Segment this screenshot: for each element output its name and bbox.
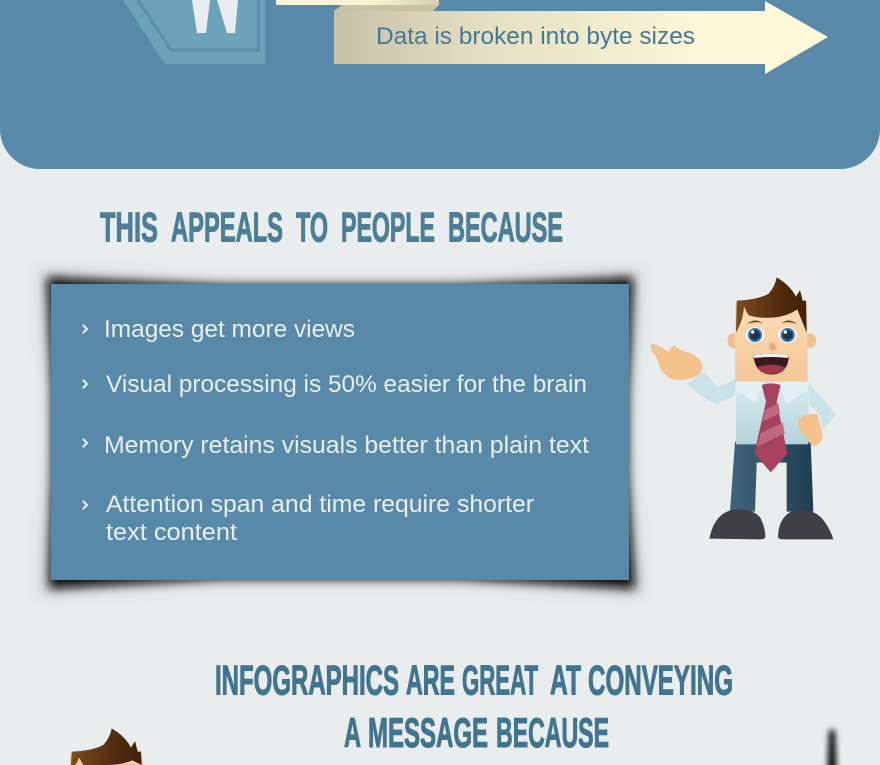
heading: infographics convey a message [215,656,733,756]
heading: this appeals to people: TO [296,204,328,250]
icon: hexagon badge with W [123,0,265,64]
panel: top blue header band [0,0,880,169]
list item 4: text content [106,519,237,546]
character tie [754,383,787,472]
list item 1: Images get more views [104,316,355,343]
icon: cartoon businessman presenting [650,277,837,539]
heading: this appeals to people [100,204,563,250]
list item 2: Visual processing is 50% easier for the brain [106,371,587,398]
panel shadow: lower panel edge [826,730,838,765]
heading: this appeals to people: APPEALS [171,204,283,250]
character collar [736,381,808,403]
heading: infographics convey a message: INFOGRAPHICS [215,656,399,704]
list item 4 [84,491,534,546]
list item 4: Attention span and time require shorter [106,491,534,518]
heading: infographics convey a message: BECAUSE [496,709,609,756]
character arms [687,372,837,429]
heading: infographics convey a message: CONVEYING [588,656,733,704]
arrow text: Data is broken into byte sizes [376,23,695,50]
heading: this appeals to people: BECAUSE [448,204,563,250]
list item 3: Memory retains visuals better than plain text [104,432,589,459]
character shoes [709,509,833,539]
character hands [650,344,823,446]
heading: this appeals to people: THIS [100,204,158,250]
character shirt [736,381,808,444]
heading: infographics convey a message: AT [550,656,581,704]
heading: infographics convey a message: MESSAGE [368,709,488,756]
heading: this appeals to people: PEOPLE [341,204,435,250]
character head [727,277,816,382]
ribbon: upper banner end [276,0,439,11]
heading: infographics convey a message: GREAT [462,656,538,704]
heading: infographics convey a message: ARE [406,656,455,704]
arrow: data banner [334,1,828,74]
icon: second businessman head, cropped [70,728,143,765]
panel: reasons list [40,270,642,595]
character legs [730,442,813,512]
heading: infographics convey a message: A [344,709,361,756]
